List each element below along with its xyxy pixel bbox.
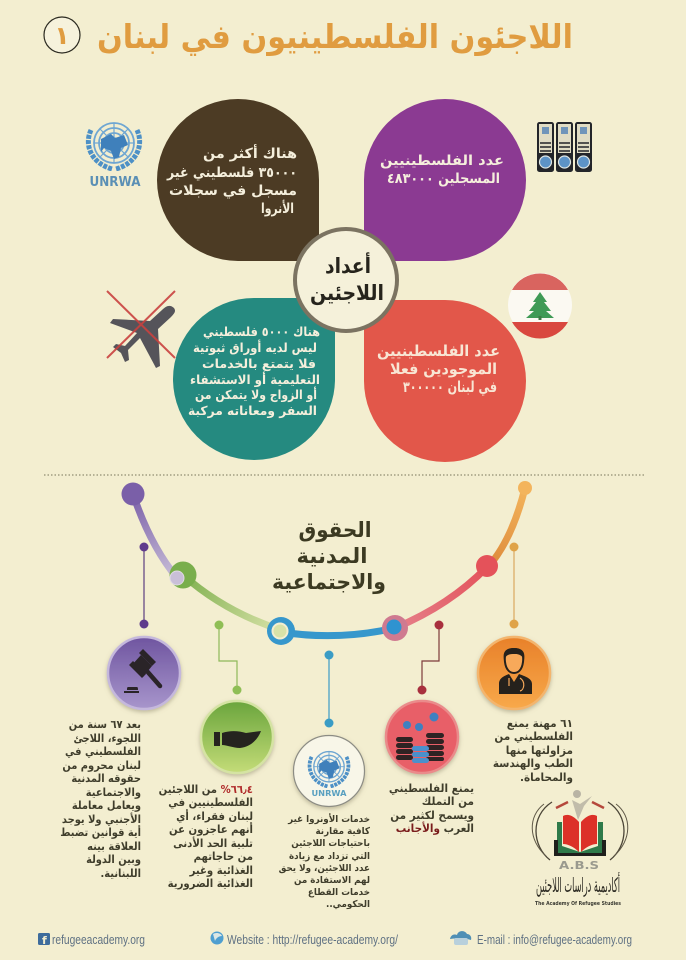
panel: registered Palestinians (purple) bbox=[364, 99, 526, 261]
connector: blue bbox=[324, 650, 334, 728]
footer: facebook: refugeeacademy.org bbox=[52, 933, 145, 947]
connector: orange bbox=[510, 542, 518, 628]
text: poverty item: الفلسطينيين في bbox=[168, 797, 253, 809]
text: undocumented details: هناك ٥٠٠٠ فلسطيني bbox=[203, 324, 320, 339]
heading: civil and social rights: الحقوق bbox=[298, 518, 372, 542]
connector: purple bbox=[140, 542, 148, 628]
text: poverty item: تلبية الحد الأدنى bbox=[173, 837, 253, 850]
text: ownership item: من التملك bbox=[422, 795, 474, 808]
logo: Academy of Refugee Studies: The Academy Of Refugee Studies bbox=[535, 901, 622, 907]
text: gavel item: وبين الدولة bbox=[86, 854, 141, 866]
part number badge: ١ bbox=[54, 21, 70, 50]
text: gavel item: حقوقه المدنية bbox=[71, 773, 141, 785]
heading: civil and social rights: والاجتماعية bbox=[272, 570, 386, 594]
text: present count bbox=[377, 342, 500, 396]
footer: facebook: f bbox=[42, 934, 47, 947]
text: gavel item: ويعامل معاملة bbox=[72, 800, 141, 812]
text: gavel item: العلاقة بينه bbox=[87, 841, 141, 853]
panel: undocumented Palestinians (teal) bbox=[173, 298, 335, 460]
centre circle: refugee numbers: أعداد bbox=[325, 251, 371, 278]
connector: red bbox=[418, 620, 444, 694]
panel: unregistered Palestinians (brown) bbox=[157, 99, 319, 261]
text: professions item: مزاولتها منها bbox=[506, 744, 573, 757]
text: gavel item: اللجوء، اللاجئ bbox=[73, 733, 141, 745]
text: UNRWA services item: لهم الاستفادة من bbox=[294, 876, 370, 886]
text: UNRWA services item: الحكومي.. bbox=[326, 900, 370, 910]
text: gavel item: الفلسطيني في bbox=[65, 746, 141, 758]
text: professions item: ٦١ مهنة يمنع bbox=[507, 717, 573, 730]
text: ownership item: العرب والأجانب bbox=[396, 822, 474, 835]
text: poverty item: ٦٦٫٤% من اللاجئين bbox=[159, 784, 253, 796]
icon: crossed-out plane bbox=[107, 291, 175, 368]
text: present count: الموجودين فعلا bbox=[390, 360, 497, 378]
text: UNRWA services item: عدد اللاجئين، ولا يحق bbox=[279, 864, 370, 874]
panel: Palestinians in Lebanon (red) bbox=[364, 300, 526, 462]
icon: UNRWA badge bbox=[294, 736, 364, 806]
icon: open hand bbox=[201, 701, 273, 773]
text: undocumented details: ليس لديه أوراق ثبوتية bbox=[193, 339, 317, 355]
text: unregistered count bbox=[166, 144, 297, 217]
divider bbox=[44, 474, 645, 476]
timeline curve bbox=[122, 481, 532, 645]
text: UNRWA services item: كافية مقارنة bbox=[316, 827, 371, 837]
text: undocumented details bbox=[188, 324, 320, 418]
text: gavel item: لبنان محروم من bbox=[62, 760, 141, 772]
icon: Lebanon flag bbox=[508, 273, 572, 339]
text: unregistered count: الأنروا bbox=[261, 200, 294, 217]
heading: civil and social rights bbox=[272, 518, 386, 594]
text: UNRWA services item: التي تزداد مع زيادة bbox=[289, 852, 370, 862]
text: unregistered count: مسجل في سجلات bbox=[169, 183, 297, 199]
text: undocumented details: أو الزواج ولا يتمكن من bbox=[195, 386, 317, 402]
text: gavel item: الأجنبي ولا يوجد bbox=[62, 812, 141, 826]
text: undocumented details: التعليمية أو الاستشفاء bbox=[190, 371, 320, 387]
text: ownership item: يمنع الفلسطيني bbox=[389, 782, 474, 795]
icon: doctor bbox=[478, 637, 550, 709]
centre circle: refugee numbers bbox=[295, 229, 397, 331]
text: poverty item bbox=[159, 784, 253, 890]
centre circle: refugee numbers: اللاجئين bbox=[310, 281, 384, 305]
connector: green bbox=[214, 620, 242, 694]
text: gavel item bbox=[60, 719, 141, 880]
part number badge bbox=[44, 17, 80, 53]
text: undocumented details: السفر ومعاناته مركبة bbox=[188, 403, 317, 418]
icon: server files bbox=[537, 122, 592, 172]
text: professions item bbox=[493, 717, 573, 784]
text: UNRWA services item: خدمات الأونروا غير bbox=[287, 813, 370, 825]
text: registered count: المسجلين ٤٨٣٠٠٠ bbox=[387, 171, 500, 187]
text: poverty item: الغذائية وغير bbox=[189, 865, 253, 877]
title: اللاجئون الفلسطينيون في لبنان bbox=[97, 17, 573, 57]
text: unregistered count: ٣٥٠٠٠ فلسطيني غير bbox=[166, 165, 297, 181]
text: present count: في لبنان ٣٠٠٠٠٠ bbox=[403, 378, 497, 396]
icon: UNRWA logo: UNRWA bbox=[90, 175, 140, 190]
text: gavel item: اللبنانية. bbox=[101, 868, 141, 880]
footer: email bbox=[450, 931, 632, 947]
footer: email: E-mail : info@refugee-academy.org bbox=[477, 933, 632, 947]
text: UNRWA services item: خدمات القطاع bbox=[308, 888, 370, 898]
text: ownership item bbox=[389, 782, 474, 835]
text: gavel item: بعد ٦٧ سنة من bbox=[69, 719, 141, 731]
icon: UNRWA badge: UNRWA bbox=[312, 789, 347, 798]
text: poverty item: أنهم عاجزون عن bbox=[169, 822, 253, 836]
text: professions item: الطب والهندسة bbox=[493, 757, 573, 770]
logo: Academy of Refugee Studies: A.B.S bbox=[559, 859, 599, 872]
text: UNRWA services item bbox=[279, 813, 371, 910]
text: unregistered count: هناك أكثر من bbox=[203, 144, 297, 162]
text: ownership item: ويسمح لكثير من bbox=[390, 809, 474, 822]
text: registered count bbox=[380, 153, 504, 187]
footer: website: Website : http://refugee-academy.org/ bbox=[227, 933, 398, 947]
text: gavel item: أية قوانين تضبط bbox=[60, 824, 141, 839]
heading: civil and social rights: المدنية bbox=[296, 544, 368, 568]
icon: gavel bbox=[108, 637, 180, 709]
text: professions item: الفلسطيني من bbox=[494, 730, 573, 743]
icon: coins bbox=[386, 701, 458, 773]
text: professions item: والمحاماة. bbox=[520, 771, 573, 784]
icon: UNRWA logo bbox=[88, 123, 140, 190]
text: UNRWA services item: باحتياجات اللاجئين bbox=[291, 839, 370, 849]
text: undocumented details: فلا يتمتع بالخدمات bbox=[202, 356, 316, 371]
text: poverty item: الغذائية الضرورية bbox=[168, 878, 253, 890]
text: gavel item: والاجتماعية bbox=[86, 787, 141, 799]
text: present count: عدد الفلسطينيين bbox=[377, 342, 500, 360]
logo: Academy of Refugee Studies bbox=[532, 790, 628, 907]
text: poverty item: لبنان فقراء، أي bbox=[176, 809, 253, 823]
text: registered count: عدد الفلسطينيين bbox=[380, 153, 504, 169]
text: poverty item: من حاجاتهم bbox=[194, 851, 253, 863]
